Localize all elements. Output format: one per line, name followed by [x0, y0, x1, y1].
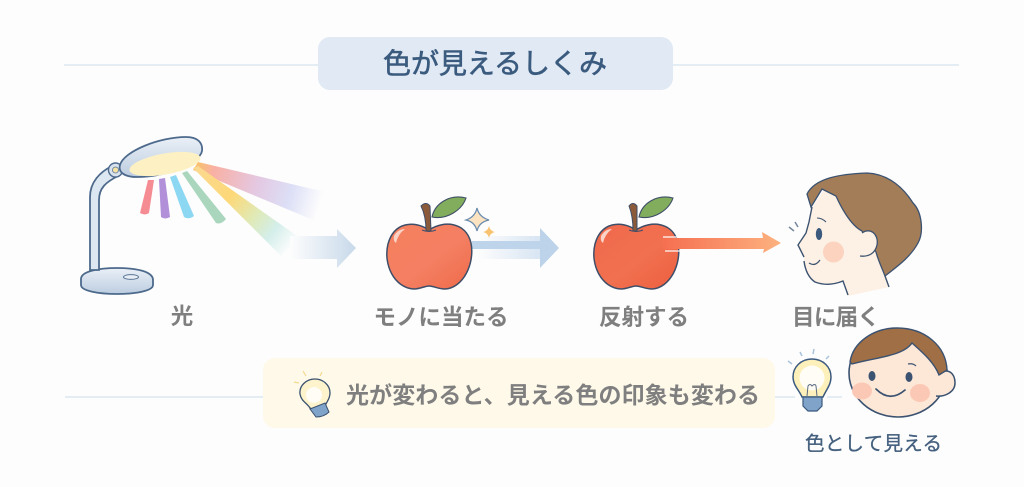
icon: desk lamp	[81, 137, 202, 294]
label: hits object: モノに当たる	[374, 305, 508, 330]
hair	[850, 328, 947, 375]
apple stem	[421, 204, 431, 231]
label: light: 光	[171, 304, 193, 329]
eye	[816, 228, 822, 240]
ear	[936, 371, 955, 395]
arrow: reflected light	[663, 232, 781, 253]
cheeks	[852, 382, 872, 400]
icon: child profile	[789, 173, 921, 296]
apple leaf	[432, 197, 466, 218]
label: reflects: 反射する	[599, 305, 689, 330]
icon: apple with sparkle	[387, 197, 495, 289]
mouth	[809, 260, 820, 264]
lamp base	[81, 268, 153, 294]
label: reaches eye: 目に届く	[792, 305, 880, 330]
lamp head	[120, 137, 202, 177]
icon: bulb	[788, 349, 831, 411]
arrow: light hits apple	[472, 228, 559, 268]
mouth	[876, 389, 905, 396]
arrow: light to object	[290, 229, 356, 268]
cheek	[823, 242, 844, 262]
note text: 光が変わると、見える色の印象も変わる	[346, 382, 760, 408]
lamp arm	[90, 166, 118, 270]
light rays	[140, 162, 334, 256]
sparkle	[466, 208, 489, 231]
title: 色が見えるしくみ	[383, 48, 607, 79]
eyes	[868, 371, 876, 381]
sight marks	[789, 222, 798, 231]
hair	[807, 173, 921, 276]
label: seen as color: 色として見える	[805, 433, 942, 455]
icon: small bulb	[294, 371, 330, 417]
ear	[858, 231, 877, 256]
note panel	[263, 358, 775, 428]
icon: smiling child	[849, 328, 955, 417]
icon: reflecting apple	[594, 197, 679, 289]
face	[798, 188, 889, 296]
face	[849, 329, 947, 417]
title	[318, 37, 673, 90]
